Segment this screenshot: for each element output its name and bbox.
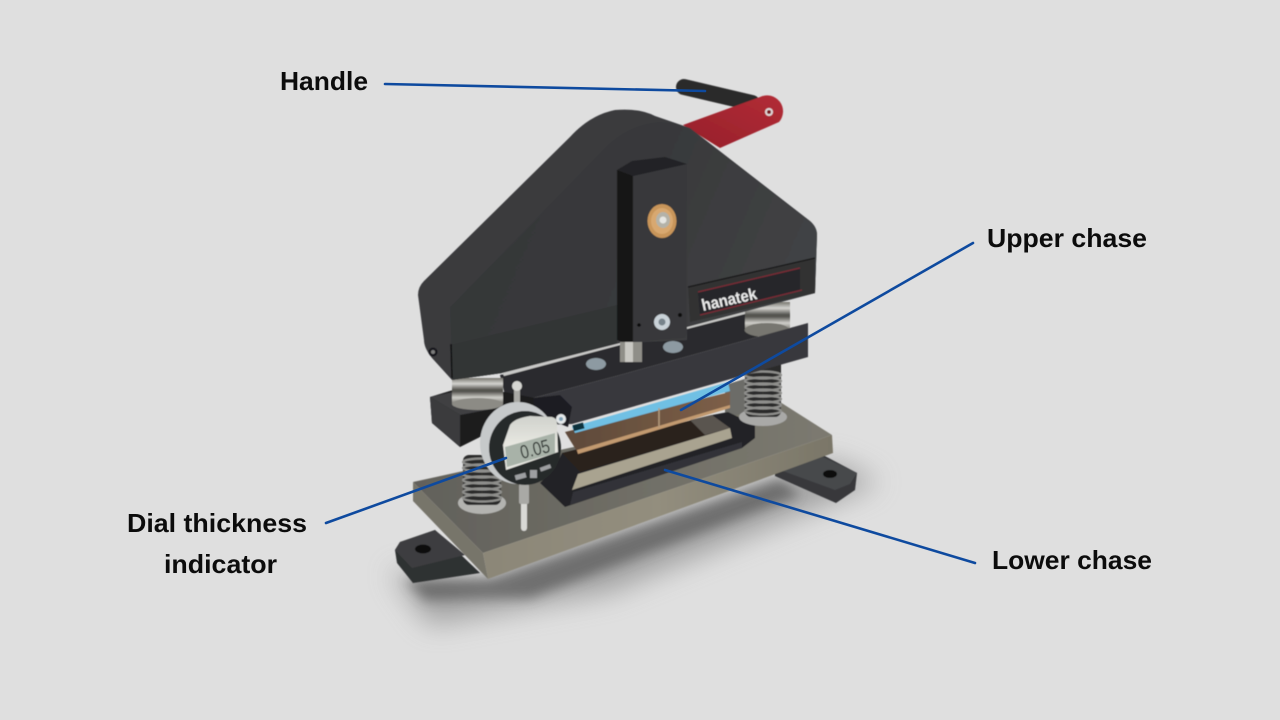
rear grey panel behind chase — [725, 378, 748, 418]
gauge buttons — [515, 464, 551, 480]
label: Handle: Handle — [280, 66, 368, 96]
gauge top stem — [512, 381, 522, 404]
silver strips — [502, 342, 620, 376]
leader: lower chase — [665, 470, 975, 563]
bearing right — [744, 302, 790, 337]
machine housing — [418, 110, 817, 380]
gauge bottom stem — [519, 484, 529, 531]
red handle arm — [683, 95, 783, 148]
label: Dial thickness indicator — [127, 508, 307, 579]
housing shell — [418, 110, 817, 380]
leader lines — [326, 84, 975, 563]
bar top surface — [500, 312, 790, 398]
press machine photo illustration — [395, 87, 857, 583]
gauge bezel — [480, 402, 556, 484]
spring right — [739, 355, 787, 426]
leader: handle — [385, 84, 705, 91]
mounting foot left — [395, 530, 480, 583]
dial thickness indicator gauge — [480, 381, 561, 531]
floor shadow — [390, 460, 880, 625]
left block — [430, 390, 535, 447]
lower housing trim — [450, 305, 617, 380]
label: Dial thickness indicator: indicator — [164, 549, 277, 579]
upper press bar — [430, 302, 808, 447]
housing front panel — [450, 122, 817, 380]
nameplate: hanatek — [700, 285, 759, 315]
centre plate top — [617, 157, 687, 176]
bar front face — [533, 323, 808, 425]
lcd display: 0.05 — [518, 436, 552, 464]
label: Dial thickness indicator: Dial thickness — [127, 508, 307, 538]
lower chase — [540, 412, 755, 507]
pivot brass washer — [648, 204, 676, 238]
gauge face — [503, 416, 558, 470]
base plate — [413, 402, 833, 579]
mounting foot right — [775, 455, 857, 503]
bolts — [428, 313, 683, 370]
gauge mounting block — [533, 395, 572, 427]
leader: upper chase — [681, 243, 973, 410]
upper chase — [565, 382, 730, 454]
leader: dial thickness indicator — [326, 458, 506, 523]
centre plate — [633, 164, 687, 342]
nameplate — [688, 258, 815, 322]
centre plate side — [617, 170, 633, 342]
spring left — [458, 455, 506, 514]
label: Upper chase: Upper chase — [987, 223, 1147, 253]
handle grip — [684, 87, 752, 103]
label: Lower chase: Lower chase — [992, 545, 1152, 575]
bearing left — [452, 378, 503, 410]
lcd display — [505, 433, 555, 467]
